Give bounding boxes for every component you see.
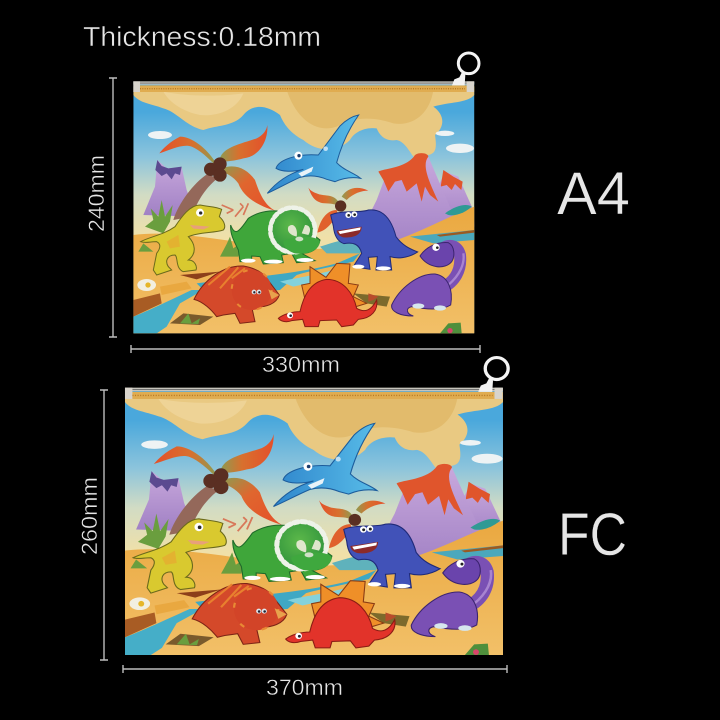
label 260mm: 260mm (77, 477, 102, 555)
zipper pull ring (452, 53, 479, 85)
grass tufts (138, 200, 240, 324)
big palm (159, 125, 275, 220)
FC height dimension (100, 390, 108, 660)
title: thickness: Thickness:0.18mm (83, 21, 321, 52)
size label A4: A4 (557, 160, 630, 227)
clouds (133, 87, 474, 157)
A4 width dimension (131, 345, 480, 353)
small white clouds (148, 131, 474, 153)
label 330mm: 330mm (262, 352, 340, 377)
small fern (222, 203, 248, 217)
blue t-rex (331, 210, 418, 270)
volcanoes (350, 153, 474, 253)
small palm (308, 187, 368, 233)
zipper band (133, 85, 474, 92)
red triceratops (194, 266, 279, 323)
ground (133, 207, 474, 333)
FC width dimension (123, 665, 507, 673)
purple long-neck dinosaur (392, 243, 464, 316)
pterodactyl (267, 115, 361, 193)
size label FC: FC (558, 501, 627, 568)
river and cliffs (133, 253, 390, 333)
label 370mm: 370mm (266, 675, 343, 700)
A4 bag with dinosaur print (133, 53, 479, 333)
green triceratops (231, 208, 320, 264)
yellow dinosaur (141, 205, 225, 275)
red stegosaurus (278, 263, 378, 327)
flower (137, 279, 462, 333)
left purple mountain (143, 160, 197, 217)
FC bag with dinosaur print (125, 358, 508, 655)
zipper rail (133, 81, 474, 85)
A4 height dimension (109, 78, 117, 337)
label 240mm: 240mm (84, 155, 109, 232)
